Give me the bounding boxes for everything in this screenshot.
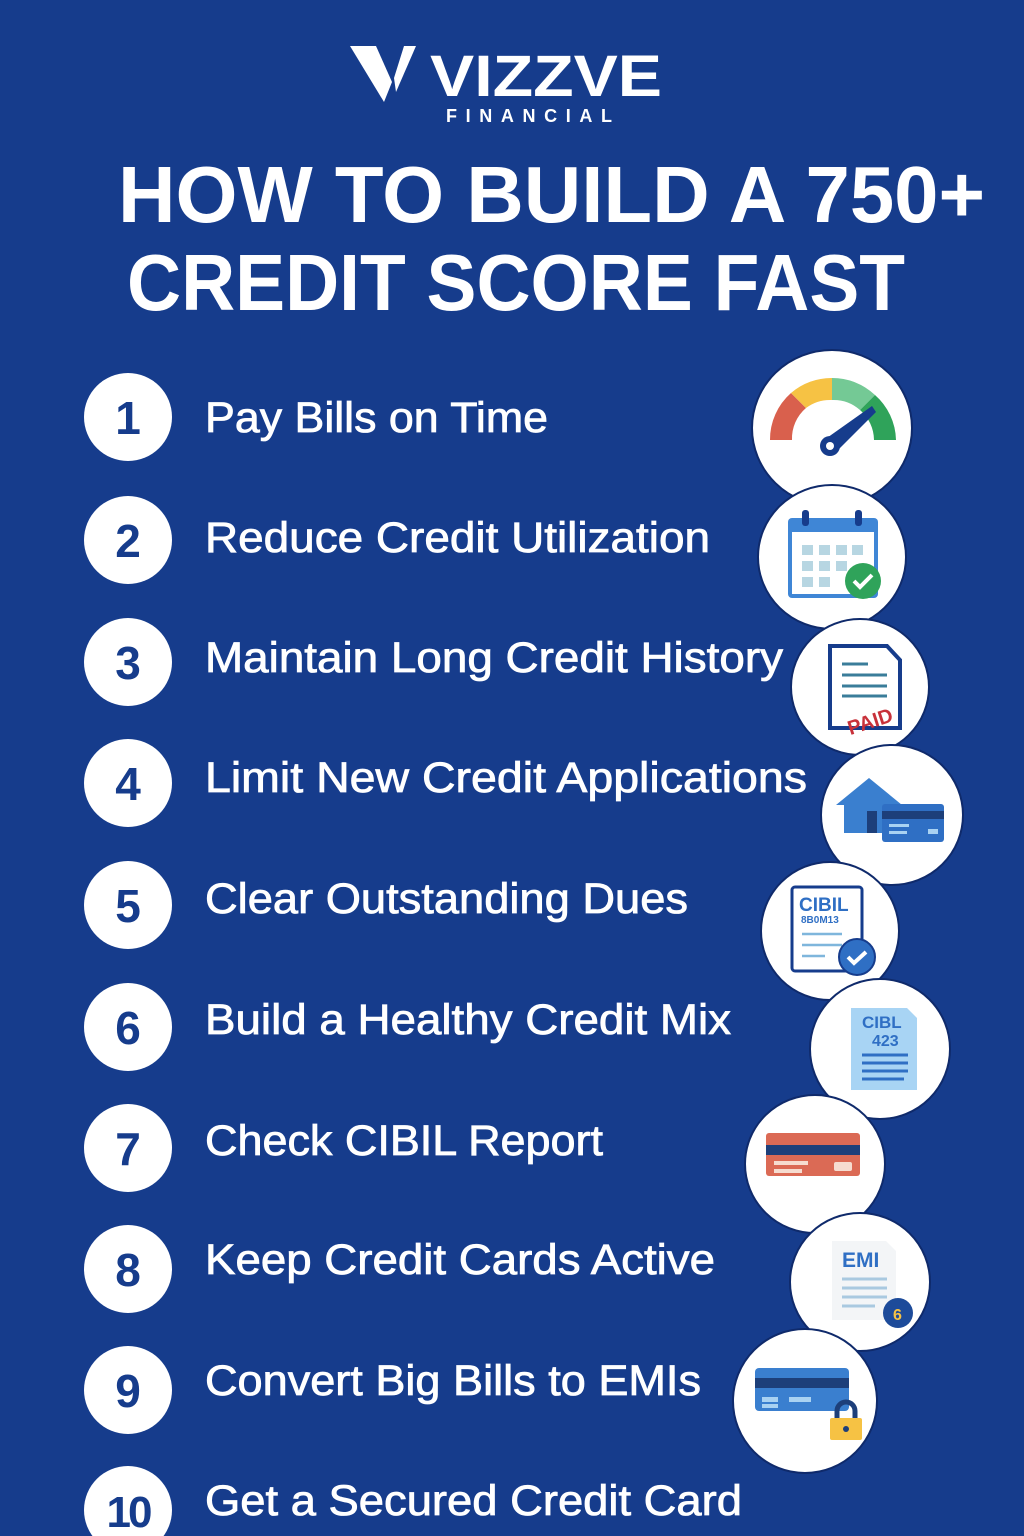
item 8 bbox=[84, 1225, 715, 1313]
item 5: Clear Outstanding Dues bbox=[205, 875, 688, 923]
item 8: 8 bbox=[115, 1244, 141, 1296]
item 4: 4 bbox=[115, 758, 141, 810]
item 7 bbox=[84, 1104, 603, 1192]
item 3: 3 bbox=[115, 637, 141, 689]
item 3 bbox=[84, 618, 784, 706]
item 5 bbox=[84, 861, 688, 949]
icon: CIBIL report check: CIBIL bbox=[799, 895, 849, 916]
item 2: 2 bbox=[115, 515, 141, 567]
item 2: Reduce Credit Utilization bbox=[205, 514, 710, 562]
icon: calendar bbox=[758, 485, 906, 629]
item 10 bbox=[84, 1466, 742, 1536]
title bbox=[118, 150, 985, 327]
icon: CIBL 423 document: 423 bbox=[872, 1033, 899, 1050]
icon: EMI document: EMI bbox=[842, 1249, 879, 1272]
icon: CIBIL report check bbox=[761, 862, 899, 1000]
icon: paid document: PAID bbox=[845, 705, 896, 740]
item 1: 1 bbox=[115, 392, 141, 444]
item 5: 5 bbox=[115, 880, 141, 932]
item 3: Maintain Long Credit History bbox=[205, 634, 784, 682]
logo bbox=[350, 44, 662, 126]
logo subtitle: FINANCIAL bbox=[446, 106, 612, 126]
logo mark bbox=[350, 46, 416, 102]
item 9: Convert Big Bills to EMIs bbox=[205, 1357, 701, 1405]
item 1 bbox=[84, 373, 548, 461]
item 10: 10 bbox=[107, 1488, 151, 1536]
icon: card with lock bbox=[733, 1329, 877, 1473]
item 4 bbox=[84, 739, 807, 827]
item 8: Keep Credit Cards Active bbox=[205, 1236, 715, 1284]
item 10: Get a Secured Credit Card bbox=[205, 1477, 742, 1525]
icon: CIBL 423 document: CIBL bbox=[862, 1013, 902, 1032]
title: HOW TO BUILD A 750+ bbox=[118, 150, 985, 239]
icon: CIBIL report check: 8B0M13 bbox=[801, 915, 839, 926]
item 2 bbox=[84, 496, 710, 584]
icon: red credit card bbox=[745, 1095, 885, 1233]
item 6: 6 bbox=[115, 1002, 141, 1054]
icon: gauge bbox=[752, 350, 912, 506]
logo wordmark: VIZZVE bbox=[430, 44, 662, 109]
title: CREDIT SCORE FAST bbox=[127, 238, 905, 327]
item 6: Build a Healthy Credit Mix bbox=[205, 996, 732, 1044]
item 9: 9 bbox=[115, 1365, 141, 1417]
item 9 bbox=[84, 1346, 701, 1434]
item 1: Pay Bills on Time bbox=[205, 394, 548, 442]
icon: EMI document bbox=[790, 1213, 930, 1351]
icon: EMI document: 6 bbox=[893, 1307, 902, 1324]
icon: paid document bbox=[791, 619, 929, 755]
list items bbox=[84, 373, 807, 1536]
item 7: Check CIBIL Report bbox=[205, 1117, 603, 1165]
item 4: Limit New Credit Applications bbox=[205, 754, 807, 802]
item 6 bbox=[84, 983, 732, 1071]
item 7: 7 bbox=[115, 1123, 141, 1175]
icon: CIBL 423 document bbox=[810, 979, 950, 1119]
icon: house and card bbox=[821, 745, 963, 885]
